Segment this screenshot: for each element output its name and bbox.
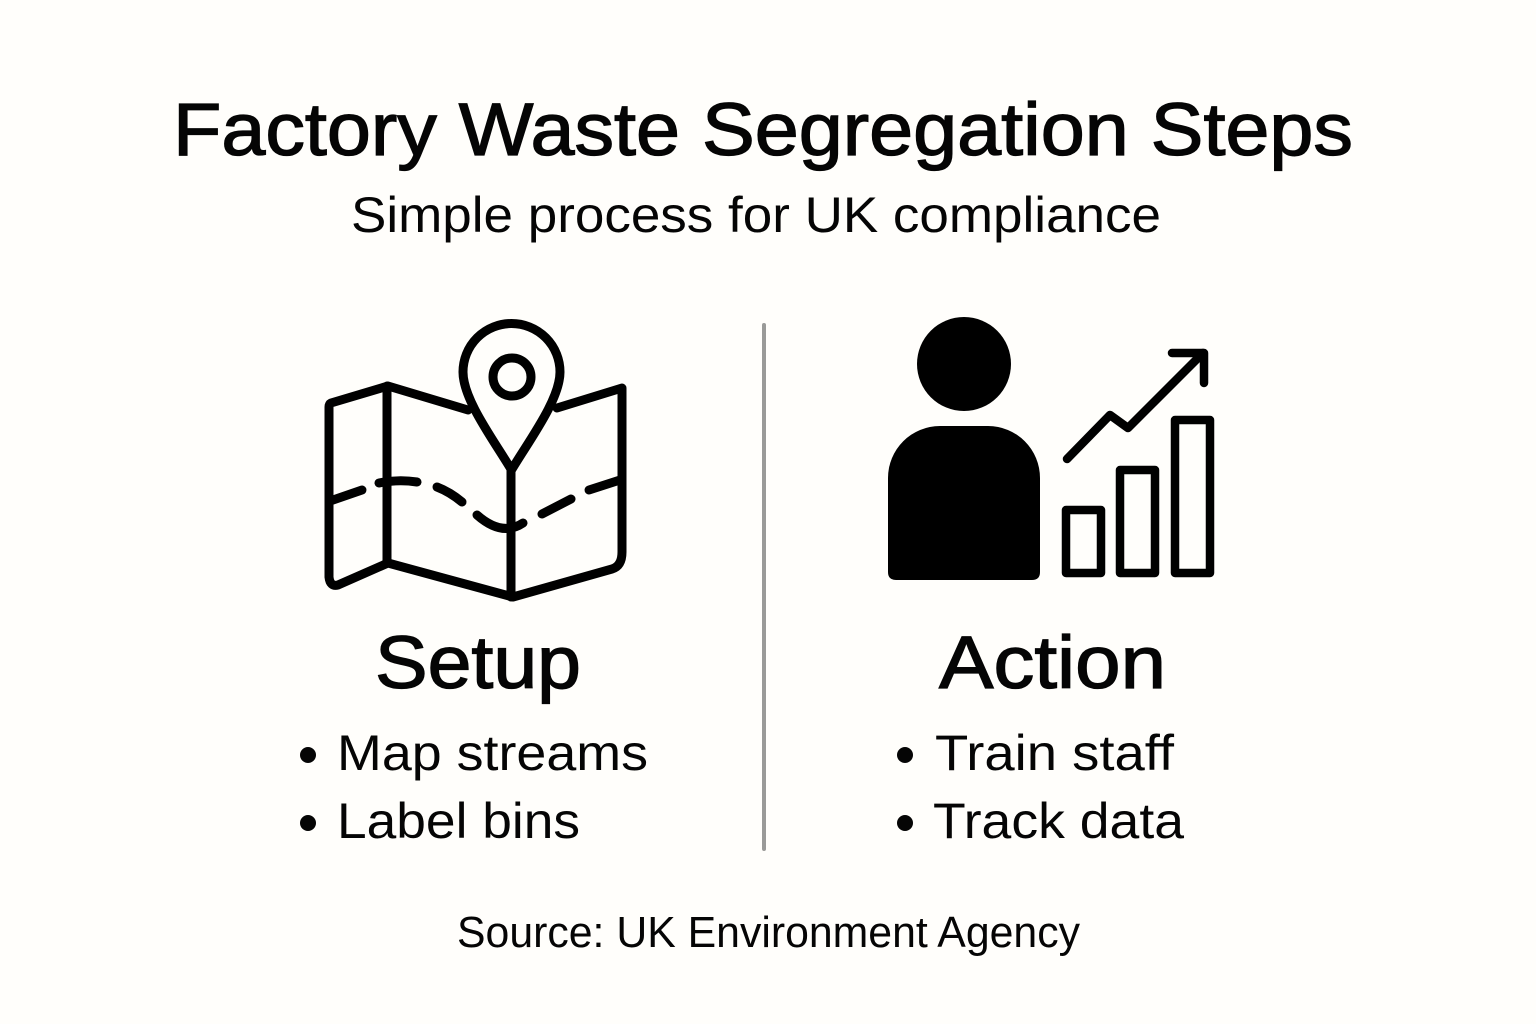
- step: label bins: Label bins: [337, 793, 580, 849]
- panel: setup: [300, 324, 648, 849]
- icon: folded map with location pin: [329, 324, 622, 597]
- heading: setup: Setup: [375, 621, 581, 704]
- step: track data: Track data: [933, 793, 1184, 849]
- list: action steps: [897, 725, 1184, 849]
- subtitle: Simple process for UK compliance: [351, 187, 1161, 243]
- title: Factory Waste Segregation Steps: [173, 88, 1353, 171]
- panel: action: [888, 317, 1210, 849]
- heading: action: Action: [939, 621, 1166, 704]
- bar chart with arrow: [1066, 353, 1210, 573]
- step: train staff: Train staff: [935, 725, 1174, 781]
- list: setup steps: [300, 725, 648, 849]
- bullet: [300, 747, 316, 763]
- bullet: [897, 815, 913, 831]
- source note: Source: UK Environment Agency: [457, 908, 1080, 957]
- icon: person with rising bar chart: [888, 317, 1210, 580]
- bullet: [300, 815, 316, 831]
- person: [888, 317, 1040, 580]
- bullet: [897, 747, 913, 763]
- step: map streams: Map streams: [337, 725, 648, 781]
- divider: [762, 323, 766, 851]
